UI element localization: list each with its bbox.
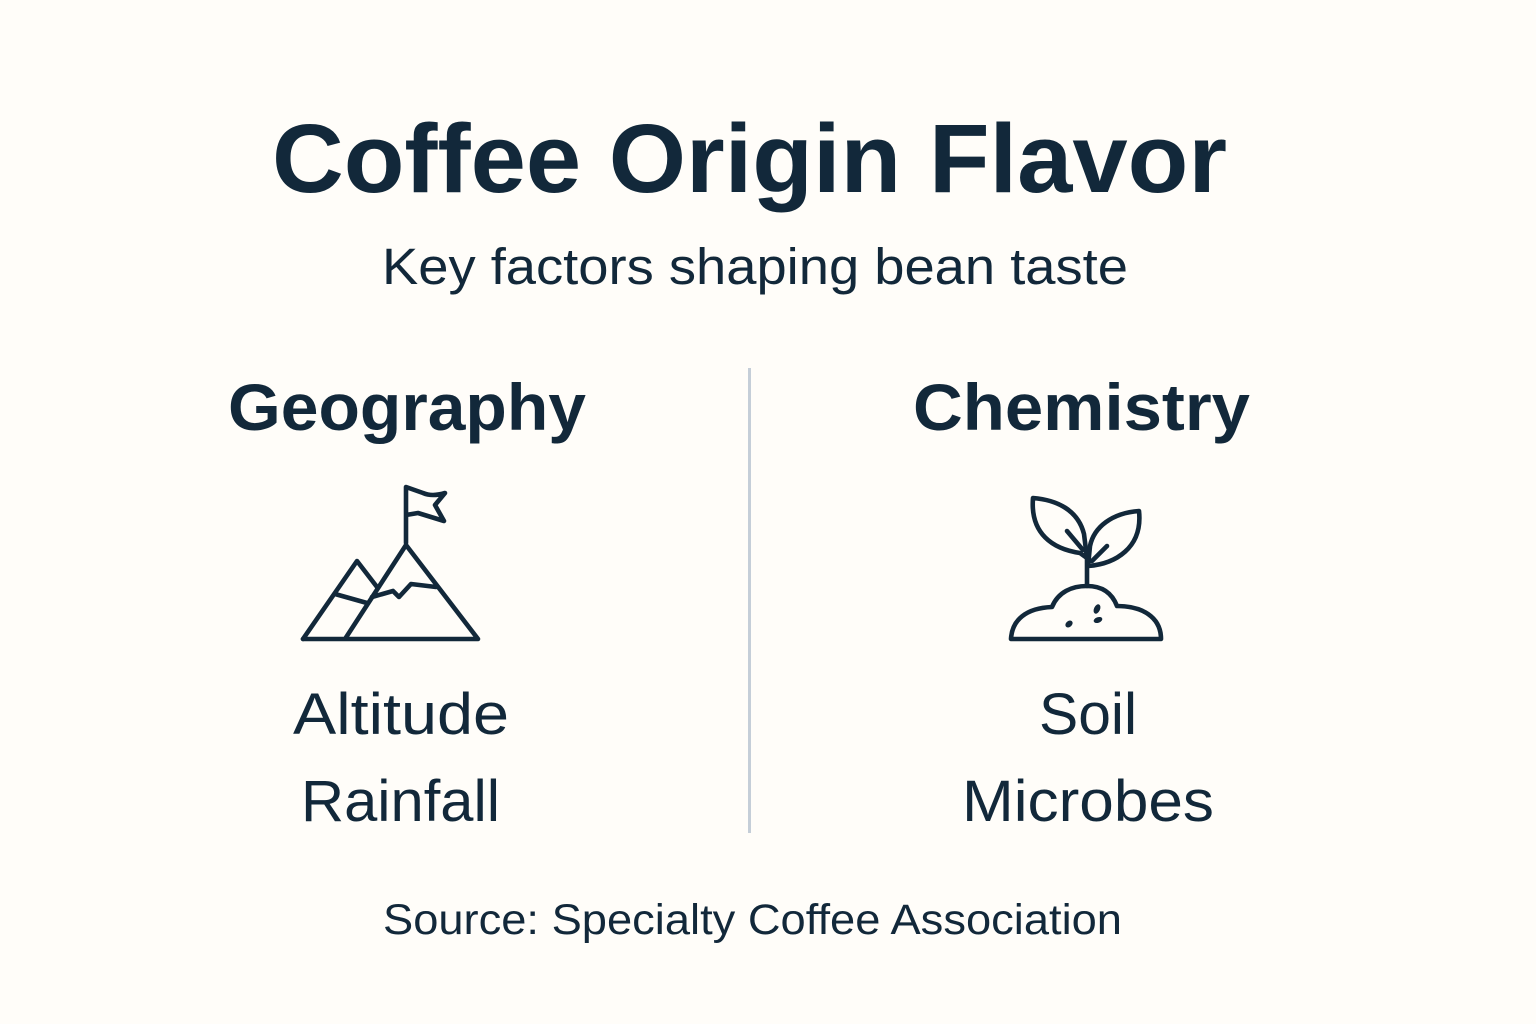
subtitle: Key factors shaping bean taste <box>382 238 1128 295</box>
panel: chemistry <box>913 370 1250 834</box>
center divider <box>748 368 751 833</box>
source note: Source: Specialty Coffee Association <box>383 896 1122 944</box>
label: Rainfall: Rainfall <box>301 769 500 834</box>
label: Soil: Soil <box>1039 682 1137 747</box>
title: Coffee Origin Flavor <box>272 104 1227 213</box>
heading: Geography: Geography <box>228 370 586 444</box>
label: Altitude: Altitude <box>293 682 509 747</box>
icon: mountain with flag <box>303 487 478 639</box>
label: Microbes: Microbes <box>962 769 1214 834</box>
icon detail: soil specks <box>1064 603 1103 629</box>
panel: geography <box>228 370 586 834</box>
icon: seedling in soil <box>1011 498 1161 639</box>
heading: Chemistry: Chemistry <box>913 370 1250 444</box>
